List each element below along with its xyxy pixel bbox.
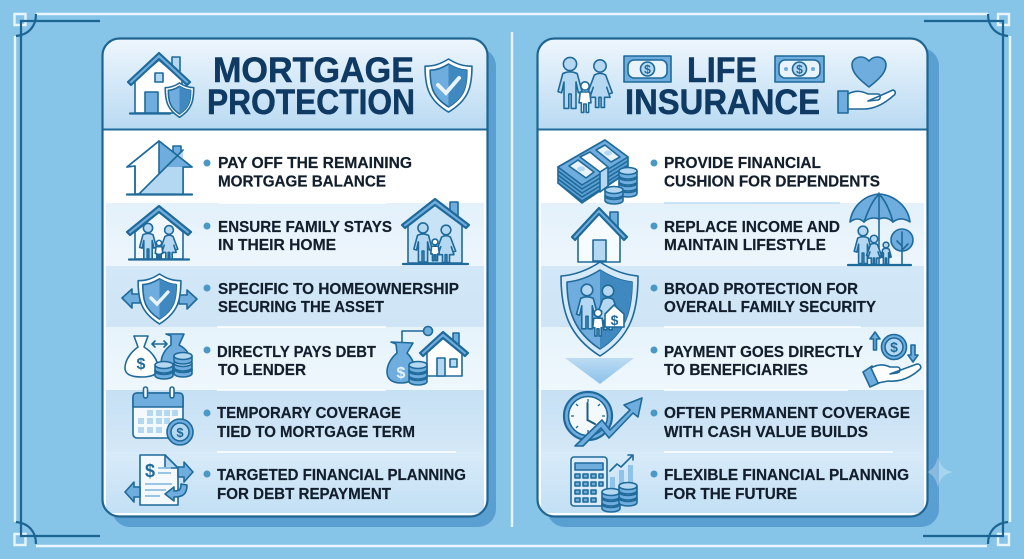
bullet (204, 160, 210, 166)
bullet (650, 470, 658, 478)
text: PROVIDE FINANCIAL (664, 155, 821, 172)
icon: large family shield: $ (611, 312, 619, 328)
row 6 (571, 455, 909, 512)
heading: mortgage protection: PROTECTION (207, 83, 415, 122)
row 6 (125, 455, 466, 505)
heading: mortgage protection: MORTGAGE (213, 51, 414, 90)
icon: money bags (125, 334, 192, 379)
icon: divided house (127, 141, 192, 194)
row 1: CUSHION FOR DEPENDENTS (664, 174, 880, 190)
row 4: TO LENDER (218, 362, 306, 379)
icon: money bag to house: $ (397, 365, 406, 382)
bullet (204, 284, 210, 292)
icon: banknote (775, 56, 824, 82)
text: TARGETED FINANCIAL PLANNING (217, 467, 466, 484)
heading: mortgage protection (207, 51, 415, 122)
icon: document with arrows (125, 455, 193, 505)
arrow: down triangle (565, 358, 634, 384)
text: PAYMENT GOES DIRECTLY (664, 344, 864, 361)
bullet (650, 284, 658, 292)
panel body (103, 39, 487, 516)
bullet (650, 346, 658, 354)
icon: calendar with coin: $ (176, 425, 184, 440)
row 5: WITH CASH VALUE BUILDS (664, 424, 868, 441)
row 3 (122, 274, 459, 324)
icon: umbrella over family and tree (848, 193, 913, 265)
row 2 (572, 193, 913, 265)
icon: calendar with coin (133, 387, 193, 445)
icon: shield with check (425, 59, 472, 112)
icon: money bags: $ (137, 356, 146, 373)
text: OFTEN PERMANENT COVERAGE (664, 405, 910, 422)
text: SPECIFIC TO HOMEOWNERSHIP (218, 281, 459, 298)
bullet (650, 222, 658, 230)
row 2: IN THEIR HOME (218, 237, 336, 254)
text: FLEXIBLE FINANCIAL PLANNING (664, 467, 909, 484)
row 4: TO BENEFICIARIES (664, 362, 808, 379)
panel: life insurance (538, 38, 939, 527)
icon: family in large house (402, 199, 469, 264)
bullet (204, 346, 210, 354)
row 5: TIED TO MORTGAGE TERM (217, 424, 415, 441)
row 4 (565, 332, 921, 387)
icon: stack of cash and coins (558, 140, 637, 204)
row 4 (125, 326, 468, 385)
bullet (204, 222, 210, 230)
row 2: MAINTAIN LIFESTYLE (664, 237, 826, 254)
heading: life insurance: INSURANCE (625, 83, 820, 122)
text: PAY OFF THE REMAINING (218, 155, 412, 172)
row 3 (561, 262, 877, 356)
panel shadow (547, 48, 939, 527)
bullet (650, 160, 658, 166)
icon: document with arrows: $ (145, 461, 155, 481)
heading: life insurance: LIFE (687, 51, 757, 90)
text: DIRECTLY PAYS DEBT (217, 344, 376, 361)
icon: house with shield (128, 53, 194, 117)
row 6: FOR DEBT REPAYMENT (217, 486, 392, 503)
bullet (204, 410, 210, 416)
row 5 (564, 392, 910, 446)
row 5 (133, 387, 415, 445)
icon: large family shield (561, 262, 638, 356)
heading: life insurance (625, 51, 820, 122)
center divider (511, 32, 513, 527)
icon: banknote: $ (644, 62, 651, 76)
icon: calculator with chart and coins (571, 455, 637, 512)
icon: money bag to house (387, 326, 468, 385)
row 2 (127, 199, 469, 264)
text: TEMPORARY COVERAGE (217, 405, 401, 422)
icon: family (558, 57, 612, 112)
icon: banknote: $ (796, 62, 803, 76)
bullet (650, 410, 658, 416)
text: REPLACE INCOME AND (664, 219, 840, 236)
row 1 (127, 141, 412, 194)
icon: coin and hand: $ (890, 339, 898, 355)
icon: coin and hand (863, 332, 921, 387)
panel body (538, 39, 927, 516)
panel shadow (112, 48, 496, 527)
icon: family in house (127, 206, 191, 260)
bullet (204, 470, 210, 478)
icon: house (572, 208, 627, 262)
row 1: MORTGAGE BALANCE (218, 174, 386, 190)
icon: clock and growth arrow (564, 392, 642, 446)
panel: mortgage protection (102, 38, 496, 527)
row 3: OVERALL FAMILY SECURITY (664, 299, 877, 316)
sparkle (927, 456, 953, 488)
icon: shield with arrows (122, 274, 197, 324)
text: ENSURE FAMILY STAYS (218, 219, 392, 236)
row 6: FOR THE FUTURE (664, 486, 797, 503)
row 1 (558, 140, 880, 204)
row 3: SECURING THE ASSET (218, 299, 385, 316)
icon: heart in hand (838, 57, 895, 113)
icon: banknote (624, 56, 671, 82)
text: BROAD PROTECTION FOR (664, 281, 858, 298)
